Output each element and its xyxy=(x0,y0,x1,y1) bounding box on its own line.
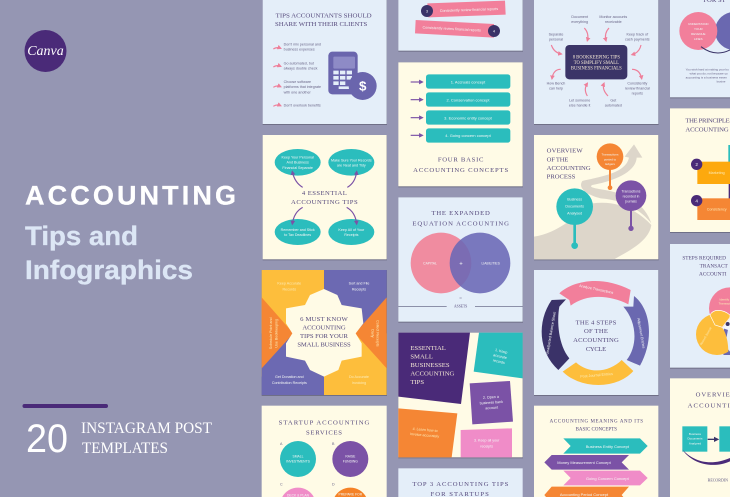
panel: startup accounting services xyxy=(262,406,387,497)
ellipse labels xyxy=(281,155,372,237)
assets equation: = xyxy=(459,295,462,300)
pink strip 3 xyxy=(421,1,506,17)
arrows xyxy=(411,82,422,135)
pin: business documents: Documents xyxy=(565,205,584,209)
number badge 4: 4 xyxy=(695,198,698,203)
pin: ledgers xyxy=(597,143,623,190)
heading: ACCOUNTI xyxy=(688,402,730,409)
segment labels: Use Bookkeeping xyxy=(274,319,278,348)
block: marketing: Marketing xyxy=(709,171,725,175)
heading xyxy=(685,117,730,133)
venn diagram: Record Journal xyxy=(699,326,713,346)
venn diagram: Identify xyxy=(720,298,730,302)
pink strip 4 xyxy=(415,20,500,38)
segment labels xyxy=(269,282,380,385)
heading: ACCOUNTING MEANING AND ITS xyxy=(550,419,643,424)
heading: THE 4 STEPS xyxy=(576,319,617,326)
heading xyxy=(279,419,370,436)
purple block xyxy=(470,381,513,424)
list of tips: Don't overlook benefits xyxy=(284,104,321,108)
centre box xyxy=(565,45,627,79)
pink circle: REVENUE xyxy=(691,32,706,36)
heading xyxy=(547,147,591,180)
heading: OF THE xyxy=(547,156,568,163)
pin: business documents: Business xyxy=(567,198,582,202)
banner: accounting period: Accounting Period Concept xyxy=(560,492,609,497)
heading: BASIC CONCEPTS xyxy=(576,427,617,432)
pink circle: YOUR xyxy=(694,27,703,31)
column 2 upper cards xyxy=(398,0,523,323)
ellipse labels: Keep All of Your xyxy=(338,228,365,232)
column 2 lower cards xyxy=(398,333,523,497)
surrounding labels: Consistently xyxy=(627,82,647,86)
heading: ACCOUNTING xyxy=(685,126,729,133)
pink arrows xyxy=(551,28,642,96)
service circles: A xyxy=(280,442,283,446)
pink circle: UNDERSTAND xyxy=(688,22,709,26)
column 3 upper cards xyxy=(534,0,659,125)
surrounding labels: Get xyxy=(610,99,616,103)
teal block xyxy=(474,333,523,378)
ellipse labels: Make Sure Your Records xyxy=(331,158,372,162)
heading xyxy=(682,255,729,278)
purple arc: Adjustment Entries xyxy=(636,318,646,349)
segment labels: Daily xyxy=(370,329,374,338)
pin: journals: journals xyxy=(624,200,637,204)
teal block: records xyxy=(492,358,505,365)
dark purple block: SMALL xyxy=(410,354,433,361)
pin: business documents xyxy=(556,188,593,249)
venn diagram: + xyxy=(459,262,463,268)
pink circle: LINES xyxy=(694,37,703,41)
step box 1: Documents xyxy=(687,437,703,441)
segment labels: Contribution Receipts xyxy=(272,381,307,385)
panel: top tips circles xyxy=(670,0,730,98)
list of tips: business expenses xyxy=(284,48,315,52)
heading: ACCOUNTING xyxy=(302,325,346,332)
segment labels: Sort and File xyxy=(349,282,369,286)
heading: SHARE WITH THEIR CLIENTS xyxy=(275,21,368,28)
heading: 4 ESSENTIAL xyxy=(302,190,347,197)
heading: TIPS ACCOUNTANTS SHOULD xyxy=(276,12,372,19)
surrounding labels: Monitor accounts xyxy=(599,15,627,19)
concept labels: 3. Economic entity concept xyxy=(444,115,493,120)
concept labels xyxy=(444,79,493,138)
icon: Canva logo xyxy=(24,30,66,72)
heading: ACCOUNTING CONCEPTS xyxy=(413,167,508,174)
heading: OVERVIEW xyxy=(547,147,583,154)
heading: ACCOUNTING xyxy=(547,165,591,172)
banner: business entity: Business Entity Concept xyxy=(586,444,630,449)
pin: ledgers: ledgers xyxy=(605,162,615,166)
heading: ACCOUNTI xyxy=(699,272,727,278)
heading: TRANSACT xyxy=(700,263,729,269)
heading: ACCOUNTING xyxy=(573,337,619,344)
centre box: 8 BOOKKEEPING TIPS xyxy=(573,55,620,60)
pin: ledgers: Transactions xyxy=(602,153,619,157)
ellipse labels: are Neat and Tidy xyxy=(337,163,366,167)
pink strip 3: 3 xyxy=(426,9,428,13)
segment labels: Get Donation and xyxy=(275,375,304,379)
centre box: BUSINESS FINANCIALS xyxy=(571,67,622,72)
heading: 6 MUST KNOW xyxy=(300,316,349,323)
banner: money measurement: Money Measurement Concept xyxy=(557,460,612,465)
recording label: RECORDIN xyxy=(708,478,728,483)
ellipse labels: Keep Your Personal xyxy=(282,155,314,159)
ellipse labels: Remember and Stick xyxy=(281,228,315,232)
pink block xyxy=(461,428,512,457)
ellipse labels: Receipts xyxy=(344,233,359,237)
banner: going concern: Going Concern Concept xyxy=(586,476,630,481)
ellipse labels: to Tax Deadlines xyxy=(284,233,311,237)
pink strip 3: Consistently review financial reports xyxy=(440,7,498,13)
subtitle xyxy=(25,221,193,285)
service circles: C xyxy=(280,483,283,487)
road with arrow xyxy=(534,144,651,259)
heading: THE EXPANDED xyxy=(431,210,490,217)
body text: accounting is a business essen xyxy=(686,76,727,80)
panel: 4 essential accounting tips xyxy=(263,135,387,260)
surrounding labels: review financial xyxy=(625,87,650,91)
list of tips: platforms that integrate xyxy=(284,85,321,89)
navy arc: Unadjusted Balance Sheet xyxy=(545,311,557,355)
surrounding labels: automated xyxy=(605,104,622,108)
icon: Canva logo: Canva xyxy=(27,44,64,59)
connector pieces xyxy=(728,145,730,199)
heading: FOUR BASIC xyxy=(438,157,484,164)
teal ellipses xyxy=(275,149,374,245)
body text: busine xyxy=(717,80,726,84)
segment labels: Collect Receipts xyxy=(376,320,380,347)
heading xyxy=(550,419,643,432)
panel: 4 steps of the accounting cycle xyxy=(534,270,659,396)
panel: steps required in transactions xyxy=(670,244,730,369)
swoosh xyxy=(682,449,730,465)
heading: STARTUP ACCOUNTING xyxy=(279,419,370,426)
pink block: receipts xyxy=(480,445,493,449)
pink strip 4: 4 xyxy=(493,29,495,33)
pink arc: Analyze Transactions xyxy=(579,284,614,295)
surrounding labels: reports xyxy=(632,92,643,96)
purple circle xyxy=(715,12,730,50)
heading xyxy=(275,12,372,28)
panel: essential small businesses tips xyxy=(398,333,523,458)
surrounding labels: cash payments xyxy=(625,37,650,41)
service circles: FUNDING xyxy=(343,459,358,463)
surrounding labels: Separate xyxy=(549,32,563,36)
panel: overview of the accounting process xyxy=(534,135,659,260)
heading: THE PRINCIPLE xyxy=(685,117,730,124)
list of tips: Choose software xyxy=(284,80,311,84)
arrow xyxy=(708,437,718,441)
panel: tips accountants should share xyxy=(263,0,387,125)
heading: CYCLE xyxy=(586,346,606,353)
venn diagram: LIABILITIES xyxy=(482,262,501,266)
surrounding labels: Keep track of xyxy=(627,32,649,36)
dark purple block: ACCOUNTING xyxy=(410,371,455,378)
pin: journals xyxy=(616,180,646,231)
centre flower shape xyxy=(286,289,363,377)
surrounding labels xyxy=(547,15,650,108)
service circles xyxy=(280,441,368,497)
heading: TOP 3 ACCOUNTING TIPS xyxy=(412,481,509,488)
surrounding labels: How Bench xyxy=(547,82,565,86)
heading: TIPS FOR YOUR xyxy=(300,333,349,340)
pink block: 3. Keep all your xyxy=(474,439,500,443)
service circles: B xyxy=(332,442,335,446)
block: consistency: Consistency xyxy=(707,208,727,212)
concept labels: 2. Conservation concept xyxy=(447,97,490,102)
body text xyxy=(686,68,729,84)
number of templates: 20 xyxy=(26,417,68,461)
assets equation xyxy=(398,295,523,309)
segment labels: Receipts xyxy=(352,287,366,291)
column 3 lower cards xyxy=(534,270,659,497)
heading: OVERVIE xyxy=(696,392,730,399)
heading: ACCOUNTING TIPS xyxy=(291,199,358,206)
heading: SMALL BUSINESS xyxy=(297,342,351,349)
venn diagram: Transact xyxy=(719,301,730,305)
panel: four basic accounting concepts xyxy=(398,62,523,187)
panel: overview of accounting recording xyxy=(670,378,730,497)
heading xyxy=(413,157,508,174)
number badge 2: 2 xyxy=(695,162,698,167)
divider bar xyxy=(22,404,108,408)
panel: financial review strips xyxy=(398,0,523,52)
dark purple block: TIPS xyxy=(410,379,424,386)
pin: journals: Transactions xyxy=(622,190,641,194)
heading xyxy=(412,481,509,497)
service circles: RAISE xyxy=(345,454,356,458)
pink strip 4: Consistently review financial reports xyxy=(422,25,481,33)
segment labels: Keep Accurate xyxy=(277,282,301,286)
heading: SERVICES xyxy=(306,429,342,436)
pin: business documents: Analysed xyxy=(567,211,582,215)
service circles: SMALL xyxy=(293,454,304,458)
venn diagram xyxy=(411,233,510,293)
surrounding labels: receivable xyxy=(605,20,622,24)
dark purple block xyxy=(398,333,470,404)
panel: top 3 accounting tips xyxy=(398,468,523,497)
service circles: INVESTMENTS xyxy=(286,459,311,463)
heading: OF THE xyxy=(584,328,608,335)
surrounding labels: everything xyxy=(571,20,588,24)
heading xyxy=(412,210,509,227)
pin: journals: recorded in xyxy=(623,195,639,199)
teal block: accurate xyxy=(493,353,507,360)
surrounding labels: Let someone xyxy=(569,99,590,103)
column 4 top card xyxy=(670,0,730,98)
service circles: PREPARE FOR xyxy=(339,492,363,496)
heading xyxy=(573,319,619,353)
service circles: D xyxy=(332,483,335,487)
concept labels: 4. Going concern concept xyxy=(445,133,492,138)
panel: expanded equation xyxy=(398,197,523,323)
surrounding labels: personal xyxy=(549,37,563,41)
ellipse labels: And Business xyxy=(286,161,309,165)
panel: the principles of accounting xyxy=(670,108,730,233)
heading xyxy=(291,190,358,206)
step box 1: Analyzed xyxy=(689,441,701,445)
column 1 lower cards xyxy=(262,270,387,497)
segment labels: Schedule Point and xyxy=(269,317,273,349)
venn diagram xyxy=(696,287,730,355)
surrounding labels: else handle it xyxy=(569,104,590,108)
list of tips xyxy=(273,43,321,108)
assets equation: ASSETS xyxy=(454,305,467,309)
body text: You wish hard at making your bu xyxy=(686,68,729,72)
heading xyxy=(688,392,730,409)
step box 1: Business xyxy=(689,432,702,436)
column 1 upper cards xyxy=(263,0,387,260)
purple block: account xyxy=(485,406,498,410)
list of tips: with one another xyxy=(284,90,311,94)
heading xyxy=(297,316,351,349)
connector arc xyxy=(701,47,730,53)
heading: EQUATION ACCOUNTING xyxy=(412,220,509,227)
templates label: INSTAGRAM POST xyxy=(81,420,212,437)
step box 1 xyxy=(682,426,707,452)
curved arrows xyxy=(292,172,357,224)
venn diagram: CAPITAL xyxy=(423,262,437,266)
purple block: business bank xyxy=(480,400,503,405)
segment labels: Records xyxy=(283,287,296,291)
subtitle: Infographics xyxy=(25,255,193,285)
pin: ledgers: posted to xyxy=(604,157,616,161)
column 4 lower cards xyxy=(670,244,730,497)
centre box: TO SIMPLIFY SMALL xyxy=(574,61,619,66)
templates label: TEMPLATES xyxy=(82,440,168,457)
step box 2 xyxy=(719,426,730,452)
surrounding labels: Document xyxy=(571,15,588,19)
title: accounting: ACCOUNTING xyxy=(25,180,236,210)
orange block: invoice accurately xyxy=(410,432,439,439)
heading: PROCESS xyxy=(547,173,576,180)
segment labels: Invoicing xyxy=(352,381,366,385)
concept labels: 1. Accruals concept xyxy=(451,79,486,84)
panel: cover column xyxy=(22,30,236,461)
templates label xyxy=(81,420,212,457)
body text: what you do; not because yo xyxy=(690,72,728,76)
list of tips: always double check xyxy=(284,66,318,70)
heading: STEPS REQUIRED xyxy=(682,255,726,261)
panel: 8 bookkeeping tips xyxy=(534,0,659,125)
orange block xyxy=(398,408,457,457)
subtitle: Tips and xyxy=(25,221,138,251)
panel: accounting meaning and basic concepts xyxy=(534,406,658,497)
purple block: 2. Open a xyxy=(483,395,500,400)
surrounding labels: can help xyxy=(549,87,563,91)
yellow arc: Post Journal Entries xyxy=(580,372,613,379)
pink circle xyxy=(679,12,717,50)
dark purple block: BUSINESSES xyxy=(410,362,450,369)
panel: 6 must know accounting tips xyxy=(262,270,387,396)
list of tips: Go automated, but xyxy=(284,61,314,65)
concept bars xyxy=(426,74,510,143)
icon: calculator and dollar: $ xyxy=(359,79,367,94)
teal block: 1. Keep xyxy=(495,348,508,355)
ellipse labels: Financial Separate xyxy=(282,166,313,170)
orange block: 4. Learn how to xyxy=(412,427,438,433)
list of tips: Don't mix personal and xyxy=(284,43,321,47)
segment labels: Do Accurate xyxy=(349,375,369,379)
dark purple block: ESSENTIAL xyxy=(410,345,446,352)
